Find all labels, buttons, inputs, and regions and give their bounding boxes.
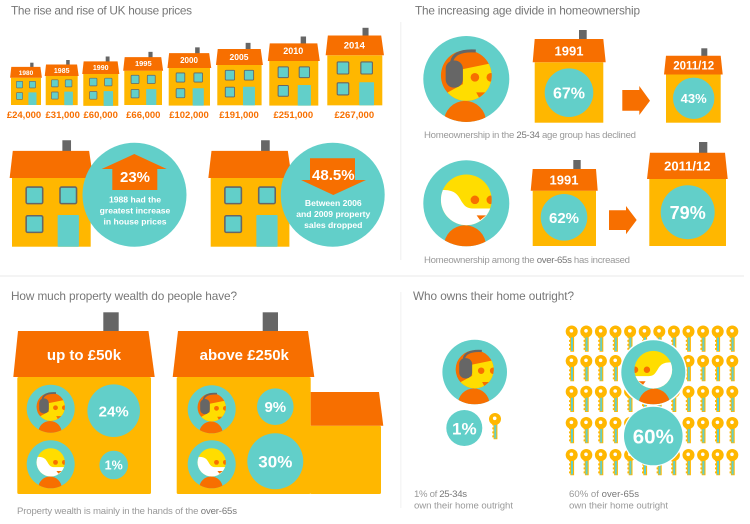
house 2011/12 79% [647, 142, 728, 246]
arrow [622, 86, 650, 115]
house 2005: £191,000 [219, 110, 259, 121]
caption: wealth: Property wealth is mainly in the hands of the over-65s [17, 506, 237, 517]
house 2011/12 79%: 2011/12 [664, 159, 710, 174]
house 1980: 1980 [19, 70, 34, 77]
caption: 60% [569, 489, 668, 512]
house 2011/12 43% [664, 48, 723, 123]
house: above £250k: 30% [258, 452, 292, 472]
house: above £250k: above £250k [200, 347, 290, 364]
house 1990 [82, 56, 119, 121]
house: above £250k: 9% [264, 399, 286, 416]
callout: 23% increase: 23% [120, 169, 150, 186]
house: up to £50k: 24% [99, 403, 129, 420]
house 2000: 2000 [180, 56, 198, 65]
callout: 23% increase: 1988 had the [109, 194, 161, 204]
icon: young person [442, 340, 507, 420]
stat: 1% [446, 410, 482, 446]
panel: rise of UK house prices [7, 4, 385, 247]
caption: 1%: own their home outright [414, 500, 513, 512]
house 2011/12 79%: 79% [670, 203, 706, 223]
caption: 1%: 1% of 25-34s [414, 489, 467, 500]
house: up to £50k [13, 312, 155, 500]
callout: 23% increase: in house prices [103, 216, 167, 226]
callout: 23% increase: greatest increase [100, 206, 171, 216]
house 2014: £267,000 [334, 110, 374, 121]
house 2014: 2014 [344, 40, 366, 51]
panel: who owns outright [413, 289, 738, 512]
house 1985: £31,000 [46, 110, 80, 121]
house 2010 [268, 36, 320, 121]
caption: 25-34 declined: Homeownership in the 25-34 age group has declined [424, 130, 636, 141]
house 1995: £66,000 [126, 110, 160, 121]
house 1985 [45, 60, 80, 121]
callout: 48.5% drop: Between 2006 [305, 198, 362, 208]
house 2011/12 43%: 2011/12 [673, 61, 714, 73]
icon: young person [423, 36, 509, 143]
heading: age divide: The increasing age divide in homeownership [415, 4, 640, 18]
house 2005: 2005 [230, 52, 249, 62]
stat: 60% [623, 406, 684, 466]
house 1980: £24,000 [7, 110, 41, 121]
house: up to £50k: up to £50k [47, 347, 122, 364]
heading: outright: Who owns their home outright? [413, 289, 574, 303]
house 2005 [216, 43, 263, 121]
callout: 48.5% drop: and 2009 property [296, 209, 371, 219]
icon: older person [423, 160, 509, 267]
house 1991 67%: 67% [553, 86, 585, 102]
house 1990: 1990 [93, 65, 109, 72]
house 2014 [326, 28, 384, 121]
panel: age divide in homeownership [415, 4, 728, 267]
callout: 48.5% drop: sales dropped [304, 220, 362, 230]
house 1985: 1985 [54, 68, 70, 75]
house 2010: 2010 [283, 46, 303, 56]
callout: 48.5% drop [208, 140, 385, 247]
house: up to £50k: 1% [105, 458, 123, 472]
stat: 1%: 1% [452, 420, 477, 438]
callout: 23% increase [10, 140, 186, 247]
house 1995: 1995 [135, 59, 152, 68]
callout: 48.5% drop: 48.5% [312, 167, 355, 184]
house 1991 67%: 1991 [555, 44, 583, 58]
arrow [609, 206, 637, 234]
house 1995 [123, 52, 163, 121]
house 2010: £251,000 [273, 110, 313, 121]
heading: property wealth: How much property wealth do people have? [11, 289, 237, 303]
house 1980 [7, 63, 42, 121]
house 1990: £60,000 [84, 110, 118, 121]
house 1991 67% [533, 30, 606, 123]
house 2011/12 43%: 43% [681, 91, 707, 106]
house 2000 [167, 47, 211, 121]
house 1991 62%: 62% [549, 210, 579, 227]
caption: 60%: own their home outright [569, 500, 668, 512]
house: above £250k [173, 312, 383, 500]
caption: 1% [414, 489, 513, 512]
heading: house prices: The rise and rise of UK house prices [11, 4, 192, 18]
house 2000: £102,000 [169, 110, 209, 121]
icon: single key [489, 413, 501, 439]
icon grid: 60 keys [566, 326, 738, 475]
house 1991 62% [531, 160, 598, 246]
icon: older person [620, 339, 687, 420]
stat: 60%: 60% [633, 426, 674, 448]
panel: property wealth [11, 289, 383, 517]
caption: 60%: 60% of over-65s [569, 489, 639, 500]
caption: over-65s increased: Homeownership among the over-65s has increased [424, 255, 630, 266]
house 1991 62%: 1991 [550, 173, 578, 188]
